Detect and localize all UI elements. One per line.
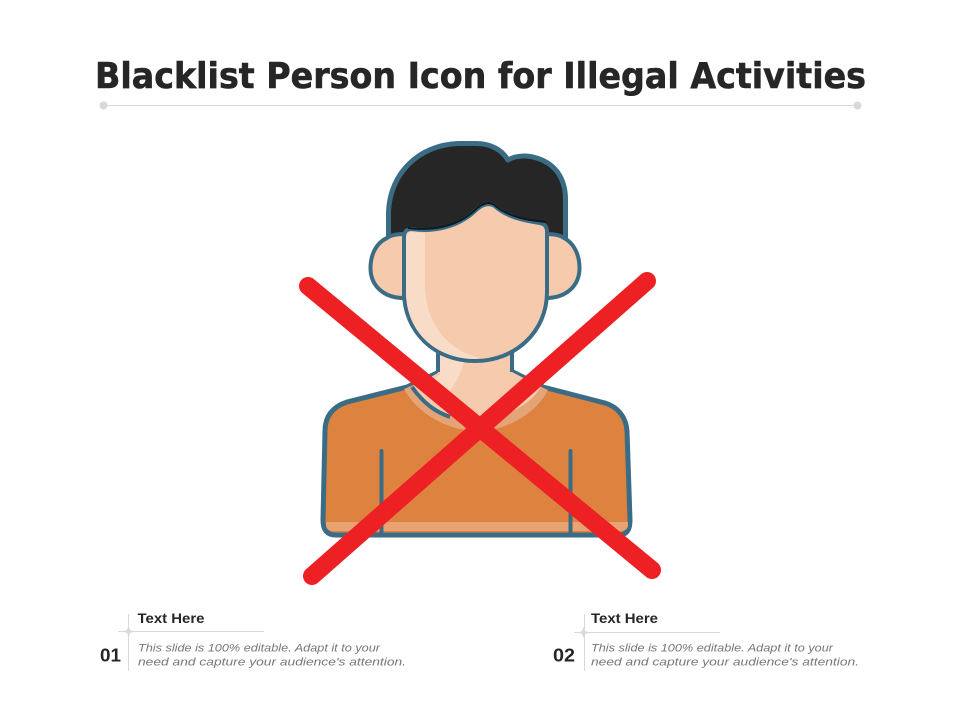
item text: This slide is 100% editable. Adapt it to your	[138, 642, 382, 654]
item heading: Text Here	[138, 610, 205, 626]
icon: person	[323, 144, 630, 535]
hairline shadow	[408, 203, 546, 229]
icon: right ear	[546, 234, 580, 298]
neck highlight	[420, 356, 464, 396]
collar band	[404, 374, 548, 431]
footer item 01	[100, 610, 406, 671]
neck outline	[412, 352, 512, 417]
icon: left ear	[370, 234, 404, 298]
item heading: Text Here	[591, 610, 658, 626]
title: Blacklist Person Icon for Illegal Activities	[95, 56, 866, 97]
bottom hem highlight	[326, 522, 628, 531]
face highlight	[406, 232, 480, 359]
item text: need and capture your audience's attention.	[591, 656, 859, 668]
item text: This slide is 100% editable. Adapt it to your	[591, 642, 835, 654]
sleeve lines	[382, 451, 570, 533]
item number: 01	[100, 646, 121, 666]
footer item 02	[553, 610, 859, 671]
icon: hair	[388, 144, 566, 250]
divider star	[574, 614, 720, 671]
item number: 02	[553, 646, 575, 666]
divider star	[118, 614, 264, 671]
title rule	[100, 102, 862, 110]
hair outline	[388, 144, 566, 238]
icon: face	[404, 204, 547, 361]
icon: red cross	[308, 281, 652, 576]
item text: need and capture your audience's attention.	[138, 656, 406, 668]
icon: torso	[323, 372, 630, 535]
icon: neck	[412, 352, 541, 418]
